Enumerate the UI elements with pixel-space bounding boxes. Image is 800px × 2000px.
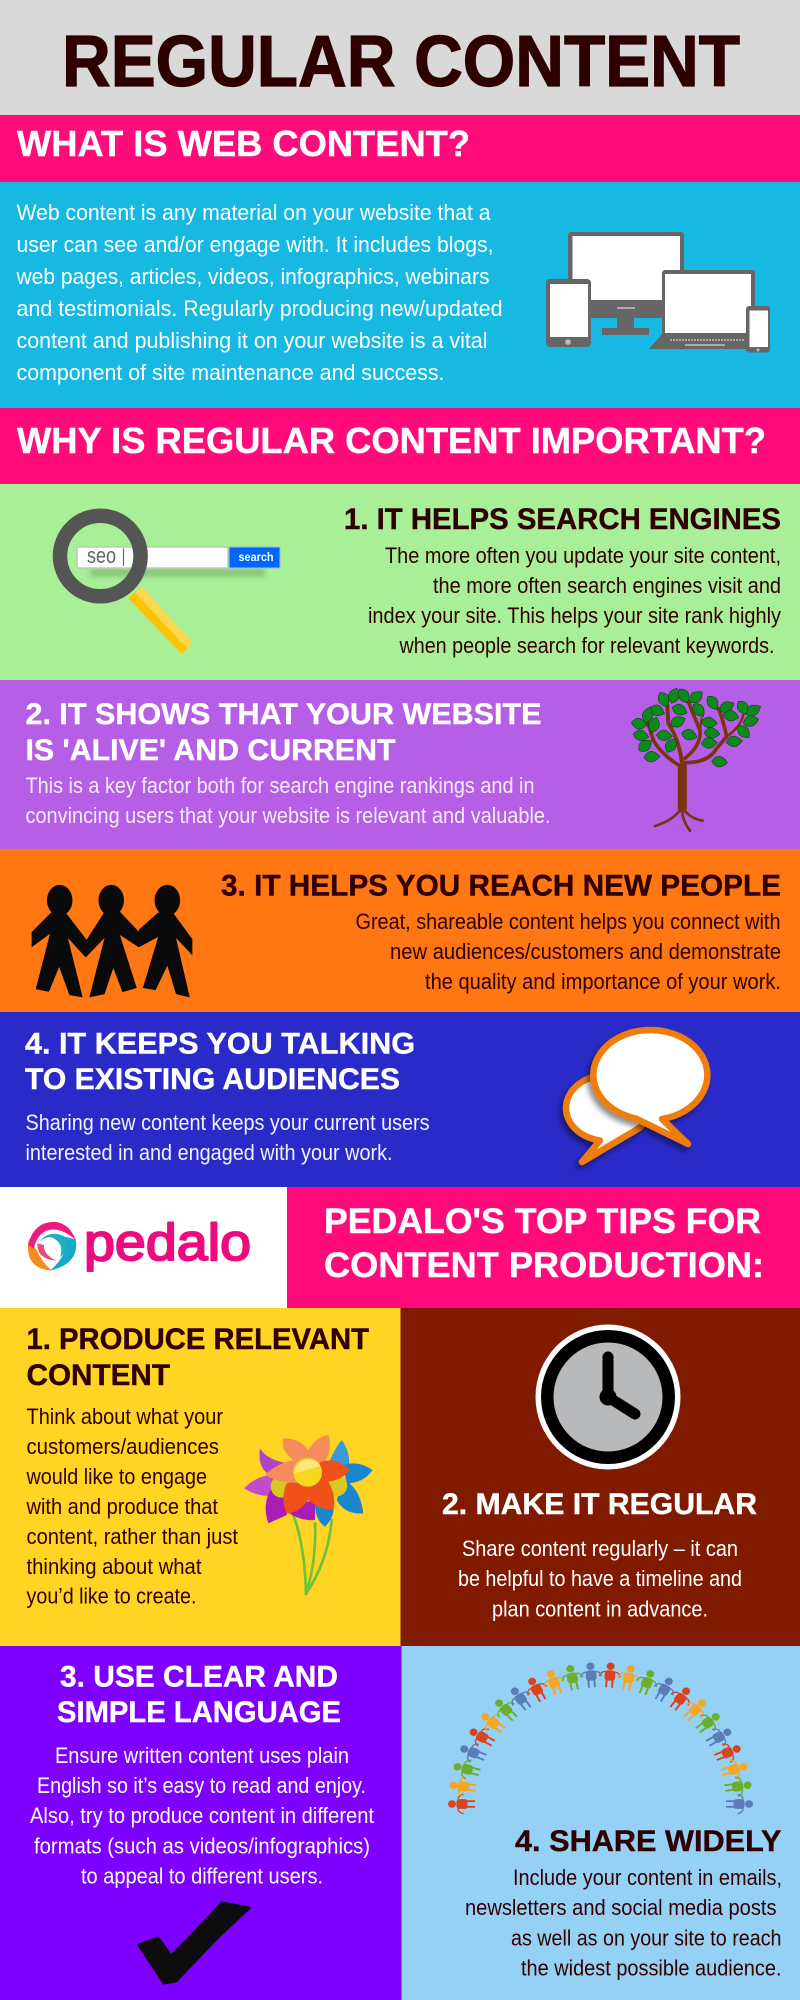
text block: English so it’s easy to read and enjoy.	[37, 1773, 366, 1798]
icon: pedalo swirl	[28, 1222, 76, 1271]
panel: tip 3 clear and simple language	[0, 1646, 402, 2000]
panel: 3 reach new people	[0, 849, 800, 1012]
icon: magnifier over search box: search	[238, 552, 274, 564]
text block: Think about what your	[26, 1404, 223, 1429]
text block: definition: web pages, articles, videos, infographics, webinars	[16, 264, 490, 289]
text block: would like to engage	[26, 1464, 207, 1489]
text block	[26, 1404, 239, 1608]
icon: arc of people	[448, 1662, 753, 1814]
heading: what is web content	[0, 115, 800, 182]
heading: 1. PRODUCE RELEVANT	[26, 1323, 369, 1356]
icon: devices	[546, 232, 770, 352]
heading: SIMPLE LANGUAGE	[57, 1696, 341, 1729]
heading: 4. IT KEEPS YOU TALKING	[25, 1028, 415, 1060]
logo wordmark: pedalo	[84, 1214, 251, 1272]
text block	[356, 909, 781, 994]
icon: check mark	[139, 1903, 249, 1983]
heading: 2. MAKE IT REGULAR	[442, 1488, 757, 1521]
text block: formats (such as videos/infographics)	[34, 1834, 370, 1858]
text block: Share content regularly – it can	[462, 1536, 738, 1561]
title: REGULAR CONTENT	[62, 22, 740, 102]
icon: magnifier over search box: seo	[87, 543, 116, 568]
text block: definition: component of site maintenance and success.	[16, 360, 444, 385]
heading: top tips	[287, 1187, 800, 1308]
text block: Sharing new content keeps your current users	[26, 1110, 430, 1135]
heading	[26, 1323, 369, 1392]
text block	[26, 1110, 430, 1165]
panel: 4 existing audiences	[0, 1012, 800, 1187]
text block	[30, 1743, 375, 1888]
text block	[26, 773, 550, 828]
heading: why is regular content important	[0, 408, 800, 484]
icon: clock	[536, 1324, 680, 1470]
icon: flower	[244, 1435, 373, 1594]
panel: tip 2 make it regular	[400, 1308, 800, 1646]
heading: 1. IT HELPS SEARCH ENGINES	[344, 503, 781, 536]
heading: CONTENT	[26, 1359, 170, 1392]
icon: speech bubbles	[566, 1030, 707, 1162]
panel: 1 it helps search engines	[0, 484, 800, 681]
text block	[465, 1865, 782, 1980]
heading: 2. IT SHOWS THAT YOUR WEBSITE	[26, 698, 542, 731]
panel: web content definition	[0, 182, 800, 408]
icon: magnifier over search box	[60, 516, 280, 654]
text block: customers/audiences	[26, 1434, 219, 1459]
panel: tip 1 produce relevant content	[0, 1308, 400, 1646]
text block: definition: content and publishing it on your website is a vital	[16, 328, 488, 353]
heading: top tips: PEDALO'S TOP TIPS FOR	[324, 1202, 761, 1241]
text block: Ensure written content uses plain	[55, 1743, 349, 1768]
heading	[57, 1660, 341, 1729]
heading	[25, 1028, 415, 1096]
panel: tip 4 share widely	[402, 1646, 800, 2000]
text block: to appeal to different users.	[81, 1864, 323, 1888]
text block: definition: Web content is any material on your website that a	[16, 200, 491, 225]
heading: 3. USE CLEAR AND	[60, 1660, 338, 1694]
text block	[368, 543, 782, 658]
logo panel: pedalo	[0, 1187, 287, 1308]
panel: 2 website alive and current	[0, 680, 800, 849]
text block: interested in and engaged with your work.	[26, 1140, 392, 1165]
heading: IS 'ALIVE' AND CURRENT	[26, 734, 395, 767]
heading: what is web content: WHAT IS WEB CONTENT?	[17, 123, 470, 164]
heading: 4. SHARE WIDELY	[515, 1825, 782, 1858]
text block: plan content in advance.	[492, 1596, 708, 1622]
text block: with and produce that	[26, 1494, 219, 1519]
text block: content, rather than just	[26, 1524, 239, 1549]
text block: definition	[16, 200, 503, 385]
heading: 3. IT HELPS YOU REACH NEW PEOPLE	[221, 870, 781, 902]
icon: tree	[631, 686, 763, 831]
icon: three paper people	[32, 885, 192, 997]
heading: TO EXISTING AUDIENCES	[25, 1063, 400, 1096]
text block: you’d like to create.	[26, 1584, 196, 1608]
text block: definition: and testimonials. Regularly producing new/updated	[16, 296, 502, 321]
heading: why is regular content important: WHY IS REGULAR CONTENT IMPORTANT?	[17, 420, 766, 461]
heading: top tips: CONTENT PRODUCTION:	[324, 1246, 764, 1285]
text block: definition: user can see and/or engage with. It includes blogs,	[16, 232, 494, 257]
heading	[26, 698, 542, 767]
text block: This is a key factor both for search engine rankings and in	[26, 773, 534, 798]
text block	[458, 1536, 742, 1622]
text block: convincing users that your website is relevant and valuable.	[26, 803, 550, 828]
text block: thinking about what	[26, 1554, 202, 1579]
text block: Also, try to produce content in different	[30, 1803, 375, 1828]
text block: be helpful to have a timeline and	[458, 1566, 742, 1591]
title banner	[0, 0, 800, 115]
